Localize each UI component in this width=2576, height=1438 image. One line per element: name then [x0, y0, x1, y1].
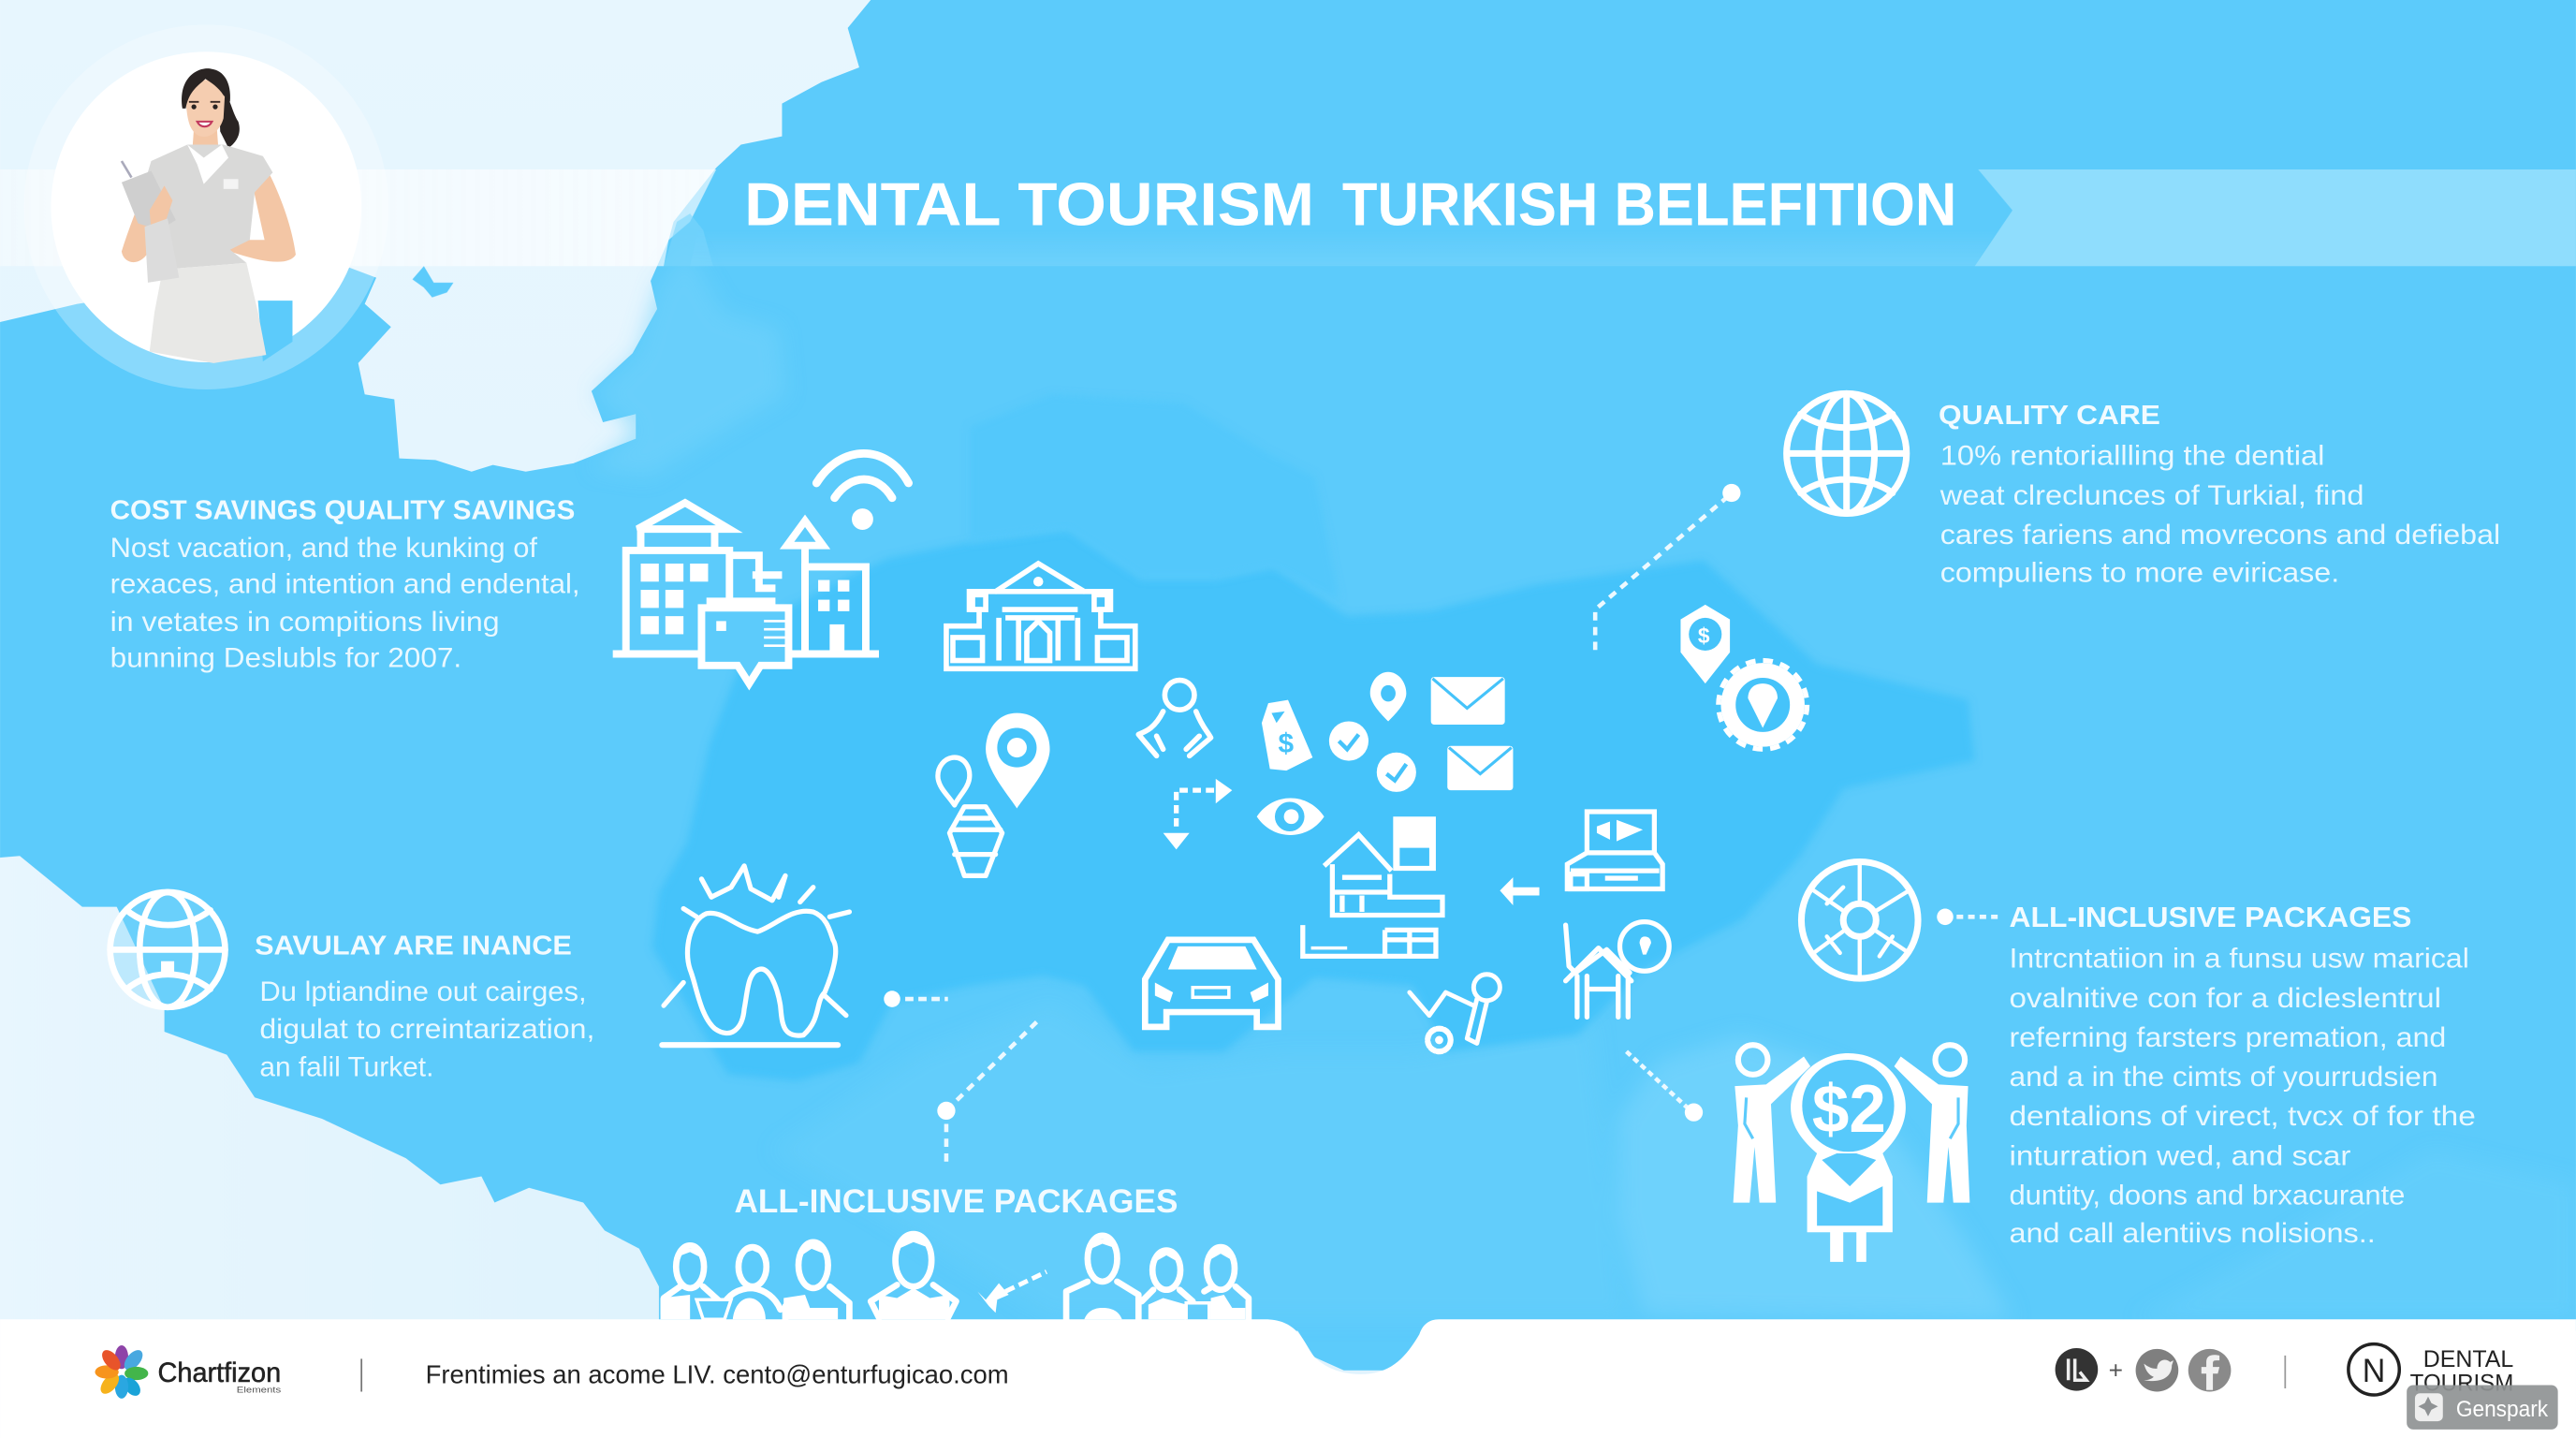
icon: car [1145, 940, 1278, 1027]
icon: museum [946, 564, 1135, 668]
logo: Chartfizon: Chartfizon [158, 1357, 281, 1388]
map: small island [413, 266, 453, 298]
connector: wheel to heading [1937, 909, 1998, 925]
heading: QUALITY CARE [1939, 401, 2160, 431]
icon: envelopes [1431, 677, 1513, 790]
body text: digulat to crreintarization, [259, 1014, 594, 1045]
icon: people with dollar [1734, 1045, 1969, 1262]
star arrow [977, 1271, 1046, 1313]
heading: SAVULAY ARE INANCE [255, 932, 572, 961]
logo: N Dental Tourism: TOURISM [2410, 1372, 2513, 1397]
icon: check badges [1329, 721, 1416, 792]
connector: to packages [937, 1022, 1036, 1167]
badge: Genspark [2407, 1385, 2558, 1430]
icon: price tag [1262, 700, 1312, 770]
icon: hotel buildings [613, 503, 879, 683]
heading: COST SAVINGS QUALITY SAVINGS [110, 496, 575, 526]
body text [2009, 944, 2476, 1249]
group of people [661, 1234, 1249, 1319]
social icons [2056, 1348, 2231, 1392]
icon: location pins and urn [938, 713, 1050, 875]
icon: globe quality care [1787, 393, 1907, 513]
body text: 10% rentoriallling the dential [1940, 441, 2324, 472]
icon: person with hands [1138, 681, 1211, 756]
badge: Genspark: Genspark [2456, 1398, 2548, 1422]
logo: Chartfizon: Elements [237, 1385, 282, 1394]
title: TURKISH BELEFITION [1342, 169, 1956, 238]
banner glow under title [690, 230, 1998, 266]
icon: wifi [816, 453, 909, 526]
heading: ALL-INCLUSIVE PACKAGES [2009, 901, 2411, 933]
icon: price tag: $ [1278, 728, 1294, 759]
icon: dollar pin: $ [1698, 624, 1710, 648]
map: lower left land [0, 856, 659, 1325]
body text: rexaces, and intention and endental, [110, 569, 580, 600]
social icons: + [2109, 1356, 2123, 1384]
icon: house with pin [1566, 922, 1669, 1017]
icon: people with dollar: $2 [1812, 1072, 1886, 1147]
body text: compuliens to more eviricase. [1940, 557, 2339, 588]
footer [0, 1319, 2576, 1438]
panel: all-inclusive packages right [2009, 901, 2476, 1249]
body text: Nost vacation, and the kunking of [110, 533, 538, 564]
body text: dentalions of virect, tvcx of for the [2009, 1101, 2476, 1132]
arrow: small left [1500, 877, 1540, 905]
icon: dollar pin [1680, 605, 1730, 683]
title [744, 169, 1956, 238]
icon: laptop device [1567, 812, 1662, 888]
body text: cares fariens and movrecons and defiebal [1940, 520, 2500, 550]
logo: N Dental Tourism: DENTAL [2423, 1347, 2513, 1372]
body text: referning farsters premation, and [2009, 1022, 2446, 1053]
map: lighter regions [592, 246, 2576, 1319]
body text: Intrcntatiion in a funsu usw marical [2009, 944, 2469, 975]
logo: Chartfizon [95, 1345, 282, 1399]
icon: tooth [662, 866, 849, 1045]
connector: globe to map [1595, 484, 1741, 654]
panel: savulay are inance [255, 932, 594, 1083]
icon: house complex [1303, 816, 1442, 956]
icon: eye [1257, 799, 1325, 835]
icon: pin small [1370, 672, 1406, 721]
contact text: Frentimies an acome LIV. cento@enturfugicao.com [426, 1360, 1009, 1389]
connector: to money figures [1627, 1051, 1703, 1122]
title: DENTAL TOURISM [744, 169, 1314, 238]
icon: gear pin [1719, 661, 1808, 749]
body text [259, 976, 594, 1083]
body text: duntity, doons and brxacurante [2009, 1180, 2405, 1211]
crowd figures [661, 1234, 1249, 1319]
banner band right [1975, 169, 2576, 266]
connector: tooth dot [884, 990, 948, 1007]
body text: bunning Deslubls for 2007. [110, 643, 461, 674]
body text: weat clreclunces of Turkial, find [1939, 480, 2364, 511]
panel: quality care [1939, 401, 2500, 588]
body text: inturration wed, and scar [2009, 1140, 2351, 1171]
body text: and call alentiivs nolisions.. [2009, 1218, 2376, 1249]
icon: globe savulay [110, 892, 225, 1007]
body text: an falil Turket. [259, 1052, 433, 1083]
panel: cost savings [110, 496, 580, 674]
map: central darker region [652, 529, 1975, 1081]
arrow: dashed elbow [1164, 779, 1232, 849]
body text [1939, 441, 2500, 588]
logo: N Dental Tourism: N [2363, 1353, 2385, 1389]
icon: tools and gear [1410, 975, 1500, 1051]
icon: wheel globe [1801, 862, 1918, 978]
logo: N Dental Tourism [2349, 1344, 2513, 1397]
body text: ovalnitive con for a dicleslentrul [2009, 983, 2441, 1014]
heading: all-inclusive packages bottom: ALL-INCLUSIVE PACKAGES [735, 1183, 1178, 1220]
body text: in vetates in compitions living [110, 607, 500, 638]
portrait: nurse in circle [24, 24, 388, 389]
body text: Du lptiandine out cairges, [259, 976, 587, 1007]
body text: and a in the cimts of yourrudsien [2009, 1062, 2438, 1093]
body text [110, 533, 580, 674]
banner band left [0, 169, 716, 266]
